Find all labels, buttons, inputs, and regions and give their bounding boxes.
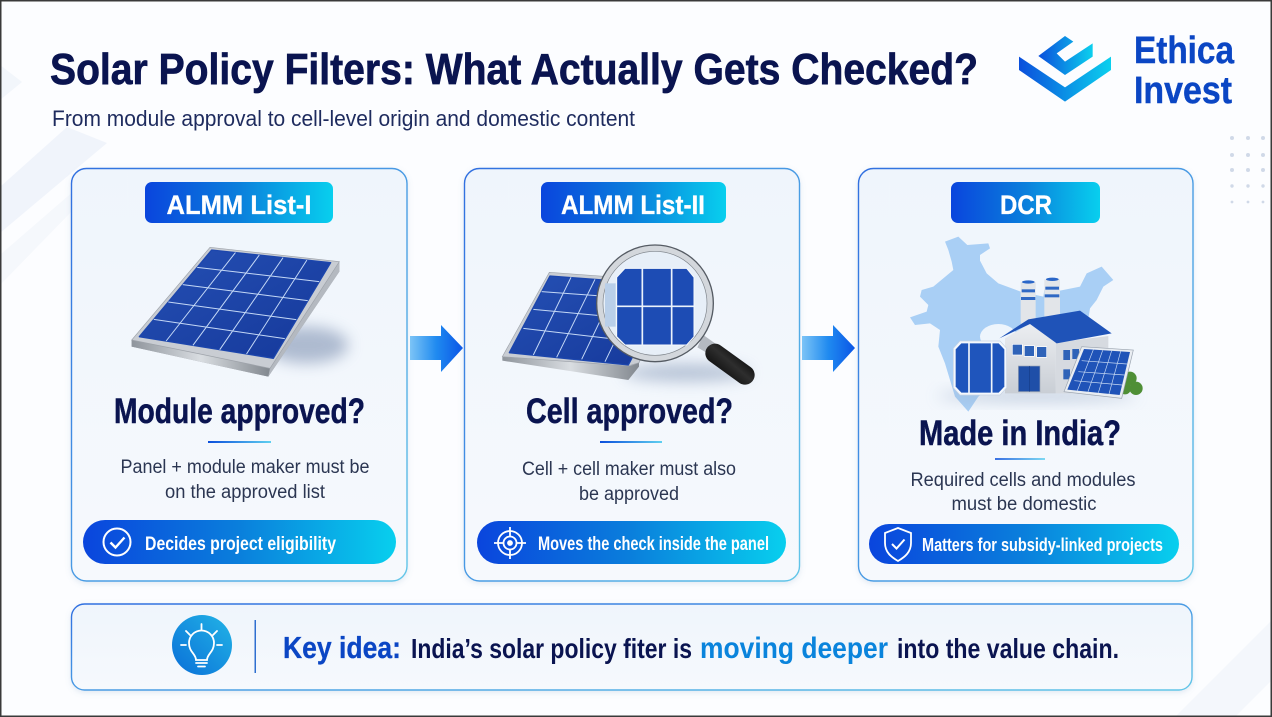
arrow: list I to list II: [410, 325, 463, 372]
callout: matters for subsidy-linked projects: Matters for subsidy-linked projects: [922, 535, 1163, 555]
description: be approved: [579, 484, 679, 505]
callout: matters for subsidy-linked projects: [869, 524, 1179, 564]
badge: DCR: DCR: [1000, 190, 1052, 220]
heading: Cell approved?: Cell approved?: [526, 392, 733, 431]
icon: light bulb: [172, 615, 232, 675]
logo text: Invest: [1134, 70, 1232, 112]
callout: moves the check inside the panel: [477, 521, 786, 564]
panel: key idea: [72, 604, 1192, 690]
icon: India map, factory, solar cell and panel: [910, 237, 1143, 412]
icon: solar panel: [132, 247, 348, 377]
description: [522, 459, 736, 505]
solar cell: [953, 341, 1007, 395]
small solar panel: [1064, 347, 1133, 398]
subtitle: From module approval to cell-level origin and domestic content: [52, 106, 635, 131]
description: Panel + module maker must be: [120, 457, 370, 478]
badge: DCR: [951, 182, 1100, 223]
title: Solar Policy Filters: What Actually Gets Checked?: [50, 45, 978, 94]
key idea statement: Key idea:: [283, 630, 401, 665]
icon: shield check: [885, 528, 911, 561]
badge: ALMM List-I: ALMM List-I: [166, 190, 312, 220]
description: must be domestic: [952, 494, 1096, 515]
magnifier handle: [697, 335, 745, 375]
callout: decides project eligibility: [83, 520, 396, 564]
callout: decides project eligibility: Decides project eligibility: [145, 534, 336, 555]
panel: ALMM List-II: [464, 168, 800, 581]
badge: ALMM List-I: [145, 182, 333, 223]
key idea statement: moving deeper: [700, 632, 888, 665]
logo text: Ethica: [1134, 30, 1235, 72]
description: on the approved list: [165, 482, 326, 503]
heading: Module approved?: Module approved?: [114, 392, 365, 431]
icon: panel under magnifying glass: [502, 245, 750, 381]
chimneys: [1021, 278, 1060, 324]
panel: DCR: [858, 168, 1193, 581]
logo: Ethica Invest: [1019, 30, 1235, 112]
bush: [1119, 372, 1143, 395]
key idea statement: into the value chain.: [897, 633, 1119, 664]
description: [120, 457, 370, 503]
arrow: list II to DCR: [802, 325, 855, 372]
heading: Made in India?: Made in India?: [919, 414, 1121, 453]
panel: ALMM List-I: [72, 168, 407, 581]
factory building: [999, 311, 1112, 393]
magnifier lens: [597, 245, 713, 362]
logo mark: [1019, 36, 1111, 102]
description: [910, 470, 1136, 515]
badge: ALMM List-II: [541, 182, 726, 223]
icon: check circle: [104, 528, 130, 556]
badge: ALMM List-II: ALMM List-II: [561, 190, 705, 220]
description: Cell + cell maker must also: [522, 459, 736, 480]
icon: target: [494, 527, 526, 559]
logo text: [1134, 30, 1235, 112]
callout: moves the check inside the panel: Moves the check inside the panel: [538, 534, 769, 555]
key idea statement: [283, 630, 1119, 665]
key idea statement: India’s solar policy fiter is: [411, 633, 692, 664]
India map: [910, 237, 1113, 412]
description: Required cells and modules: [910, 470, 1136, 491]
